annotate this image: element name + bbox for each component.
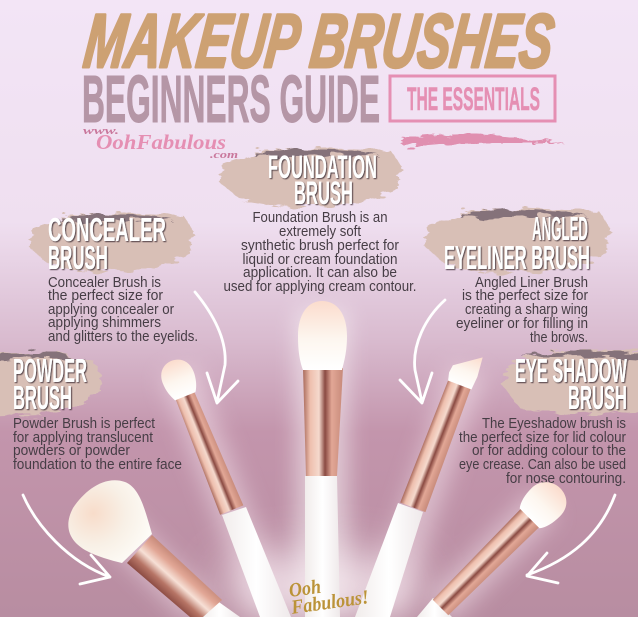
brush: powder	[68, 480, 240, 617]
brush: foundation (centre)	[298, 301, 347, 617]
description: application. It can also be	[243, 265, 397, 281]
description	[459, 416, 626, 487]
description: Concealer Brush is	[48, 275, 161, 291]
description: foundation to the entire face	[13, 457, 182, 473]
panel: powder brush: POWDER	[13, 352, 87, 389]
description: and glitters to the eyelids.	[48, 329, 198, 345]
description: is the perfect size for	[462, 288, 588, 304]
pink brush stroke	[398, 135, 565, 147]
heading	[515, 352, 627, 416]
description: The Eyeshadow brush is	[482, 416, 626, 432]
description: the perfect size for	[48, 288, 163, 304]
description: the brows.	[530, 330, 588, 346]
description: liquid or cream foundation	[242, 252, 398, 268]
description: synthetic brush perfect for	[241, 238, 399, 254]
swatch	[0, 351, 103, 417]
website logo	[83, 126, 238, 161]
panel: foundation brush	[220, 147, 416, 295]
swatch	[502, 350, 638, 415]
heading: BRUSH	[48, 239, 108, 276]
website logo: .com	[210, 150, 238, 161]
description	[224, 210, 416, 295]
description: applying shimmers	[48, 315, 161, 331]
glow behind brushes	[110, 310, 545, 615]
description: Powder Brush is perfect	[13, 416, 155, 432]
heading	[444, 210, 590, 276]
brush: eye shadow	[417, 474, 574, 617]
description	[456, 275, 588, 346]
brush: angled eyeliner	[355, 348, 485, 617]
description: eyeliner or for filling in	[456, 316, 588, 332]
brush: concealer	[156, 355, 291, 617]
arrow: to eye shadow brush	[527, 495, 615, 583]
description: used for applying cream contour.	[224, 279, 416, 295]
logo: Ooh Fabulous: Ooh	[288, 576, 322, 602]
badge: The Essentials	[390, 76, 555, 121]
arrow: to powder brush	[23, 495, 110, 584]
description	[48, 275, 198, 345]
description: the perfect size for lid colour	[459, 430, 626, 446]
arrow: to angled brush	[400, 300, 445, 403]
description: powders or powder	[13, 443, 130, 459]
description: for applying translucent	[13, 430, 153, 446]
description: for nose contouring.	[506, 471, 626, 487]
swatch	[30, 212, 194, 272]
heading: BRUSH	[13, 379, 72, 416]
panel: eye shadow brush	[459, 350, 638, 487]
description: Foundation Brush is an	[252, 210, 388, 226]
description: extremely soft	[279, 224, 361, 240]
description: or for adding colour to the	[472, 443, 626, 459]
heading: BRUSH	[294, 175, 353, 211]
logo: Ooh Fabulous	[287, 569, 370, 617]
panel: angled eyeliner brush	[425, 207, 611, 346]
heading	[13, 352, 87, 416]
heading: CONCEALER	[48, 211, 166, 248]
panel: concealer brush	[30, 211, 198, 345]
description: applying concealer or	[48, 302, 174, 318]
heading	[48, 211, 166, 276]
description: creating a sharp wing	[465, 302, 588, 318]
arrow: to concealer brush	[195, 292, 238, 403]
description	[13, 416, 182, 473]
panel: powder brush	[0, 351, 182, 473]
website logo: OohFabulous	[96, 130, 226, 154]
swatch	[220, 147, 402, 207]
description: Angled Liner Brush	[475, 275, 588, 291]
swatch	[425, 207, 611, 273]
website logo: www.	[83, 126, 119, 137]
heading	[268, 149, 377, 211]
heading: FOUNDATION	[268, 149, 377, 185]
